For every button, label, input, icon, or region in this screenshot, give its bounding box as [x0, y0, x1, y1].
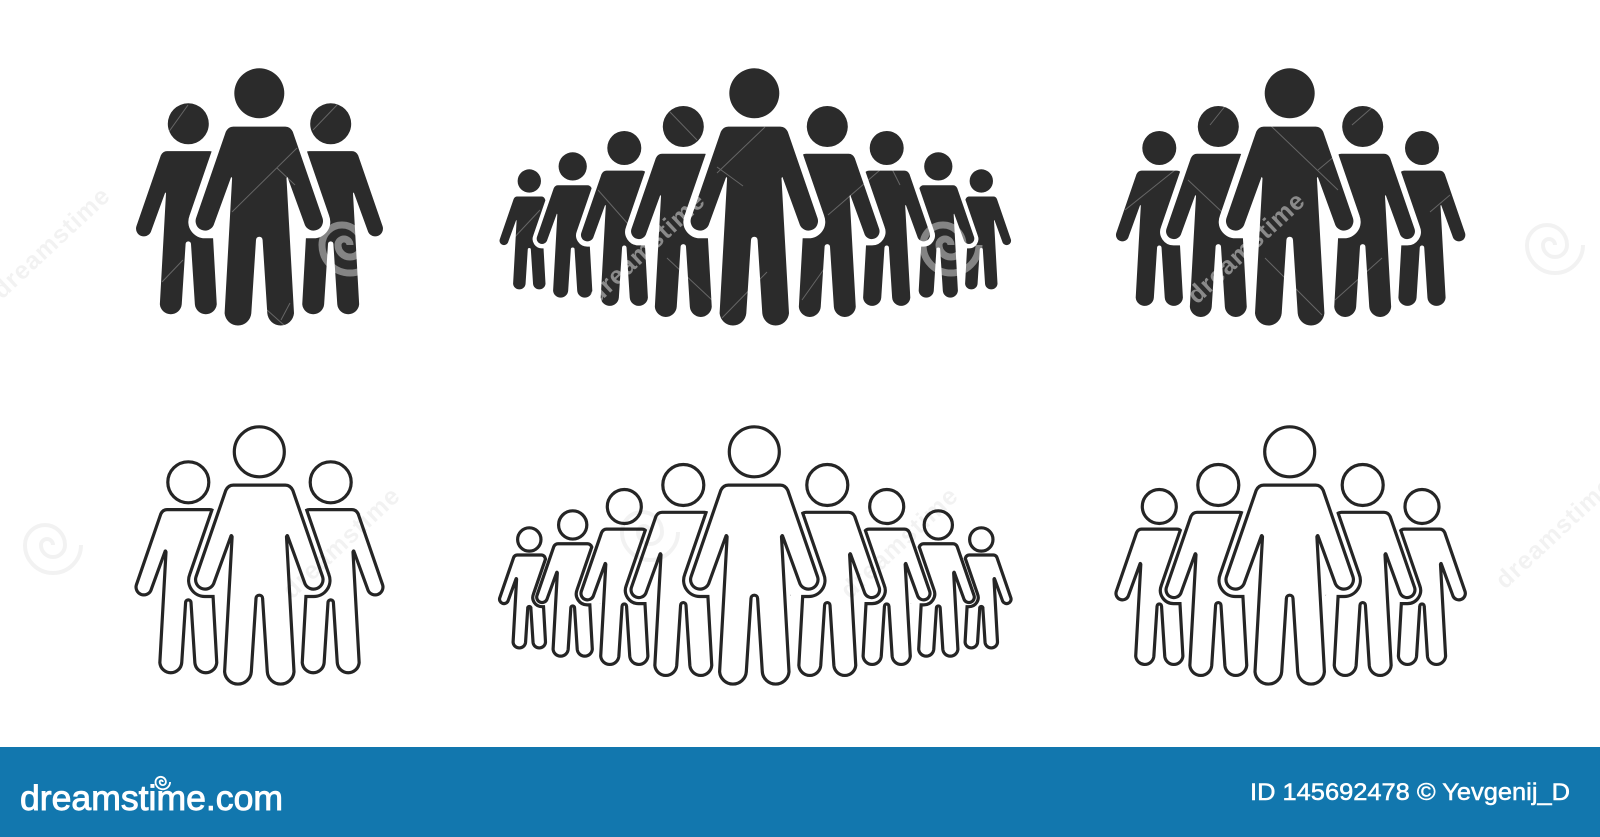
watermark text: second group: dreamstime [582, 186, 711, 309]
person: front centre [1226, 68, 1354, 326]
outline group of three people [136, 427, 383, 684]
outline people: second row pair [1166, 464, 1415, 675]
outline person: front centre [690, 427, 818, 684]
person: far right [951, 169, 1011, 289]
outline person: far left [500, 528, 559, 648]
outline person: left back [136, 462, 241, 673]
image id and credit: ID 145692478 © Yevgenij_D [1250, 779, 1570, 806]
outline person: far right [1379, 490, 1465, 664]
outline person: right back [278, 462, 383, 673]
filled group of five people [1116, 68, 1465, 326]
watermark spiral: right margin [1527, 225, 1583, 273]
person: left back [136, 103, 241, 314]
watermark text: outline second group: dreamstime [835, 481, 964, 604]
person: right third row [843, 131, 930, 306]
person: front centre [690, 68, 818, 326]
brand name: dreamstime.com [20, 779, 283, 818]
person: far left [499, 169, 559, 289]
person: right second row [775, 106, 880, 317]
person: left third row [581, 131, 668, 306]
person: front centre [195, 68, 323, 326]
person: far right [1379, 131, 1465, 306]
footer banner [0, 747, 1600, 837]
outline person: far right [952, 528, 1011, 648]
watermark spiral: outline group [622, 512, 678, 560]
person: left second row [1166, 106, 1271, 317]
outline people: fourth row pair [537, 511, 974, 656]
brand spiral icon [156, 777, 170, 789]
watermark text: third group: dreamstime [1182, 186, 1311, 309]
person: right fourth row [902, 152, 974, 298]
person: right back [278, 103, 383, 314]
watermark text: outline first group: dreamstime [277, 481, 406, 604]
watermark diagonal lines on figures [162, 100, 1450, 326]
filled group of three people [136, 68, 383, 326]
watermark overlays [0, 100, 1600, 604]
person: left second row [631, 106, 736, 317]
outline people: third row pair [581, 490, 930, 664]
watermark spiral: second group [923, 225, 979, 273]
outline person: far left [1116, 490, 1203, 664]
person: left fourth row [537, 152, 609, 298]
outline person: front centre [195, 427, 323, 684]
person: right second row [1310, 106, 1415, 317]
person: far left [1116, 131, 1203, 306]
watermark spiral: left margin [25, 525, 81, 573]
outline people: second row pair [631, 464, 880, 675]
banner background [0, 747, 1600, 837]
outline person: front centre [1226, 427, 1354, 684]
outline group of five people [1116, 427, 1465, 684]
outline group of nine people [500, 427, 1011, 684]
watermark spiral: first group [322, 225, 378, 273]
filled group of nine people [499, 68, 1011, 326]
